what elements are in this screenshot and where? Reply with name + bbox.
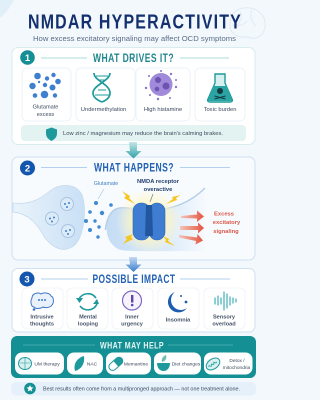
receptor glow xyxy=(116,188,182,254)
badge 1: 1 xyxy=(25,53,31,64)
pill: UM therapy: UM therapy xyxy=(34,362,60,368)
arrow: section 2 to 3 xyxy=(126,257,142,272)
card: insomnia: Insomnia xyxy=(166,318,191,324)
callout: best results: Best results often come from a multipronged approach — not one treatment alone. xyxy=(43,386,240,392)
panel: possible impact xyxy=(12,268,255,332)
card: mental looping: looping xyxy=(78,322,99,328)
pill: detox / mitochondria: Detox / xyxy=(229,358,245,364)
NMDA receptor xyxy=(133,203,165,240)
card: inner urgency: urgency xyxy=(121,322,144,328)
pill: detox / mitochondria xyxy=(204,352,252,374)
pill: diet changes: Diet changes xyxy=(172,362,201,368)
label: excess excitatory signaling: Excess xyxy=(214,212,234,218)
icon: capsule xyxy=(107,356,124,372)
panel: what may help xyxy=(11,336,256,378)
card: glutamate excess xyxy=(22,68,71,121)
card: intrusive thoughts xyxy=(22,288,63,329)
pill: detox / mitochondria: mitochondria xyxy=(223,365,251,371)
panel: what drives it xyxy=(12,48,255,144)
card: mental looping: Mental xyxy=(79,314,97,320)
icon: toxic flask xyxy=(208,74,232,102)
icon: salad bowl xyxy=(157,355,170,371)
presynaptic neuron xyxy=(13,185,84,249)
card: glutamate excess: excess xyxy=(37,112,54,118)
membrane xyxy=(106,188,205,230)
badge 3: 3 xyxy=(24,274,30,286)
label: excess excitatory signaling: excitatory xyxy=(213,220,241,226)
card: glutamate excess: Glutamate xyxy=(33,104,58,110)
pill: diet changes xyxy=(154,352,201,374)
icon: moon and stars xyxy=(168,292,187,312)
icon: thought bubble xyxy=(31,293,53,311)
badge 3 xyxy=(20,272,34,286)
icon: star badge xyxy=(24,383,36,394)
glutamate particles xyxy=(84,201,113,239)
icon: histamine cell xyxy=(145,70,177,100)
callout: best results xyxy=(11,382,256,396)
pill: UM therapy xyxy=(15,352,64,374)
card: high histamine: High histamine xyxy=(144,107,182,113)
card: insomnia xyxy=(158,288,199,329)
heading: what may help: WHAT MAY HELP xyxy=(100,340,164,352)
icon: brain xyxy=(18,358,32,370)
card: toxic burden xyxy=(195,68,245,121)
heading: what drives it: WHAT DRIVES IT? xyxy=(93,53,174,65)
icon: mitochondrion xyxy=(204,356,222,372)
callout: zinc and magnesium xyxy=(21,125,246,141)
icon: leaf xyxy=(74,356,84,371)
card: undermethylation: Undermethylation xyxy=(81,107,126,113)
panel: what happens xyxy=(12,157,255,260)
card: sensory overload xyxy=(204,288,245,329)
arrow: section 1 to 2 xyxy=(126,142,142,158)
card: high histamine xyxy=(136,68,190,121)
card: sensory overload: Sensory xyxy=(213,314,236,320)
icon: lightning bolts xyxy=(122,191,181,246)
arrows: excitatory output xyxy=(179,210,204,244)
label: glutamate: Glutamate xyxy=(94,181,118,187)
heading: possible impact: POSSIBLE IMPACT xyxy=(92,274,176,286)
icon: sound wave xyxy=(215,292,236,310)
pill: memantine: Memantine xyxy=(124,362,148,368)
badge 1 xyxy=(20,50,35,65)
postsynaptic neuron xyxy=(107,188,205,251)
card: intrusive thoughts: thoughts xyxy=(30,322,54,328)
icon: glutamate molecules xyxy=(29,73,61,98)
label: NMDA receptor overactive: overactive xyxy=(144,187,173,193)
card: toxic burden: Toxic burden xyxy=(204,107,236,113)
icon: DNA helix xyxy=(93,73,110,102)
badge 2 xyxy=(20,160,35,176)
label: NMDA receptor overactive xyxy=(137,179,180,193)
label: NMDA receptor overactive: NMDA receptor xyxy=(137,179,180,185)
card: mental looping xyxy=(67,288,108,329)
card: undermethylation xyxy=(76,68,135,121)
badge 2: 2 xyxy=(25,164,30,174)
icon: faint brain xyxy=(230,8,265,38)
callout: zinc and magnesium: Low zinc / magnesium may reduce the brain's calming brakes. xyxy=(63,131,223,137)
card: sensory overload: overload xyxy=(212,322,236,328)
pill: memantine xyxy=(106,352,151,374)
heading: what happens: WHAT HAPPENS? xyxy=(94,162,174,174)
subtitle: How excess excitatory signaling may affect OCD symptoms xyxy=(33,34,236,43)
pill: NAC: NAC xyxy=(87,362,98,368)
icon: exclamation circle xyxy=(122,291,142,310)
card: intrusive thoughts: Intrusive xyxy=(30,314,54,320)
card: inner urgency xyxy=(112,288,153,329)
icon: loop arrows xyxy=(79,294,97,310)
corner tint xyxy=(0,0,14,18)
card: inner urgency: Inner xyxy=(125,314,140,320)
label: excess excitatory signaling: signaling xyxy=(213,229,239,235)
icon: shield xyxy=(46,128,57,141)
label: excess excitatory signaling xyxy=(213,212,241,235)
pill: NAC xyxy=(67,352,103,374)
